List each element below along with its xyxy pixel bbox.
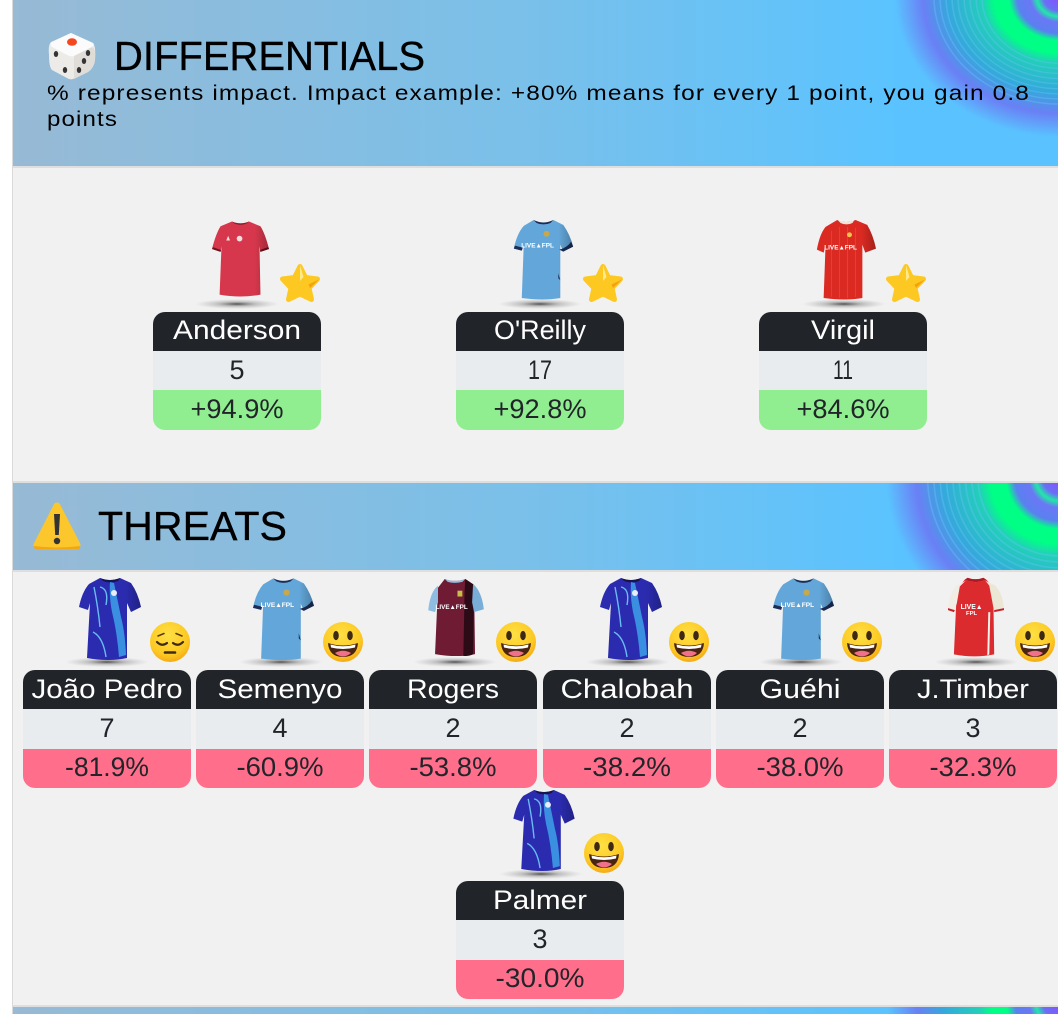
card: João Pedro: 7 xyxy=(99,713,115,743)
jersey shadow xyxy=(498,299,582,309)
player: Rogers xyxy=(369,579,537,788)
jersey shadow xyxy=(65,657,149,667)
jersey shadow xyxy=(499,869,583,879)
card: Virgil: Virgil xyxy=(811,315,875,345)
card: Chalobah xyxy=(543,670,711,788)
subtitle: % represents impact. Impact example: +80% means for every 1 point, you gain 0.8 xyxy=(47,81,1030,105)
player: Chalobah xyxy=(543,578,711,788)
player: J.Timber xyxy=(889,578,1057,788)
card: Rogers: -53.8% xyxy=(410,752,497,782)
icon: sky blue jersey xyxy=(773,578,834,660)
card: Anderson xyxy=(153,312,321,430)
card: Guéhi xyxy=(716,670,884,788)
icon: star xyxy=(586,265,622,300)
icon: smiling face xyxy=(496,622,536,662)
card: Palmer xyxy=(456,881,624,999)
icon: red striped jersey xyxy=(817,220,876,300)
card: Chalobah: Chalobah xyxy=(560,674,694,704)
icon: dark blue jersey xyxy=(600,578,662,660)
card: J.Timber xyxy=(889,670,1057,788)
subtitle: points xyxy=(47,107,118,131)
player: Semenyo xyxy=(196,578,364,788)
header: threats xyxy=(13,313,1058,643)
icon: dark blue jersey xyxy=(79,578,141,660)
card: J.Timber: J.Timber xyxy=(917,674,1029,704)
player: Guéhi xyxy=(716,578,884,788)
player: O'Reilly xyxy=(456,220,624,430)
player: Palmer xyxy=(456,790,624,999)
icon: claret jersey xyxy=(428,579,484,656)
card: O'Reilly: 17 xyxy=(528,355,552,385)
icon: sky blue jersey xyxy=(253,578,314,660)
jersey shadow xyxy=(759,657,843,667)
card: J.Timber: 3 xyxy=(965,713,981,743)
card: Semenyo: -60.9% xyxy=(236,752,324,782)
header: differentials xyxy=(13,0,1058,168)
heading: threats: THREATS xyxy=(98,503,287,549)
card: Virgil: +84.6% xyxy=(796,394,890,424)
card: Anderson: 5 xyxy=(229,355,245,385)
card: Anderson: Anderson xyxy=(173,315,301,345)
icon: star xyxy=(888,265,925,300)
icon: red jersey xyxy=(212,222,269,297)
card: Guéhi: 2 xyxy=(792,713,808,743)
jersey shadow xyxy=(802,299,886,309)
player: Anderson xyxy=(153,222,321,430)
header: next section (cropped) xyxy=(13,1005,1058,1014)
jersey shadow xyxy=(195,299,279,309)
card: Rogers: 2 xyxy=(445,713,461,743)
jersey shadow xyxy=(934,657,1018,667)
card: O'Reilly: O'Reilly xyxy=(494,315,586,345)
card: Rogers: Rogers xyxy=(407,674,499,704)
card: O'Reilly: +92.8% xyxy=(494,394,586,424)
card: Palmer: Palmer xyxy=(493,885,587,915)
card: Anderson: +94.9% xyxy=(190,394,284,424)
jersey shadow xyxy=(586,657,670,667)
card: Semenyo: 4 xyxy=(272,713,288,743)
card: Palmer: -30.0% xyxy=(496,963,584,993)
card: Guéhi: Guéhi xyxy=(760,674,840,704)
card: Semenyo: Semenyo xyxy=(218,674,342,704)
icon: smiling face xyxy=(323,622,363,662)
card: Guéhi: -38.0% xyxy=(756,752,844,782)
card: Rogers xyxy=(369,670,537,788)
heading: differentials: DIFFERENTIALS xyxy=(114,33,425,79)
icon: game die xyxy=(49,33,95,79)
icon: warning sign xyxy=(34,506,80,549)
icon: smiling face xyxy=(669,622,709,662)
icon: sky blue jersey xyxy=(514,220,573,300)
card: Chalobah: -38.2% xyxy=(583,752,671,782)
icon: dark blue jersey xyxy=(513,790,575,871)
card: João Pedro: João Pedro xyxy=(32,674,182,704)
card: J.Timber: -32.3% xyxy=(930,752,1017,782)
card: Virgil: 11 xyxy=(833,355,853,385)
jersey shadow xyxy=(413,657,497,667)
card: Semenyo xyxy=(196,670,364,788)
card: João Pedro xyxy=(23,670,191,788)
icon: smiling face xyxy=(842,622,882,662)
jersey shadow xyxy=(239,657,323,667)
player: João Pedro xyxy=(23,578,191,788)
icon: pensive face xyxy=(150,622,190,662)
player: Virgil xyxy=(759,220,927,430)
subtitle xyxy=(47,81,1030,131)
card: Chalobah: 2 xyxy=(619,713,635,743)
icon: smiling face xyxy=(584,833,624,873)
card: João Pedro: -81.9% xyxy=(65,752,149,782)
card: Virgil xyxy=(759,312,927,430)
card: Palmer: 3 xyxy=(532,924,548,954)
icon: star xyxy=(282,265,319,300)
icon: smiling face xyxy=(1015,622,1055,662)
card: O'Reilly xyxy=(456,312,624,430)
icon: red and white jersey xyxy=(948,578,1004,656)
